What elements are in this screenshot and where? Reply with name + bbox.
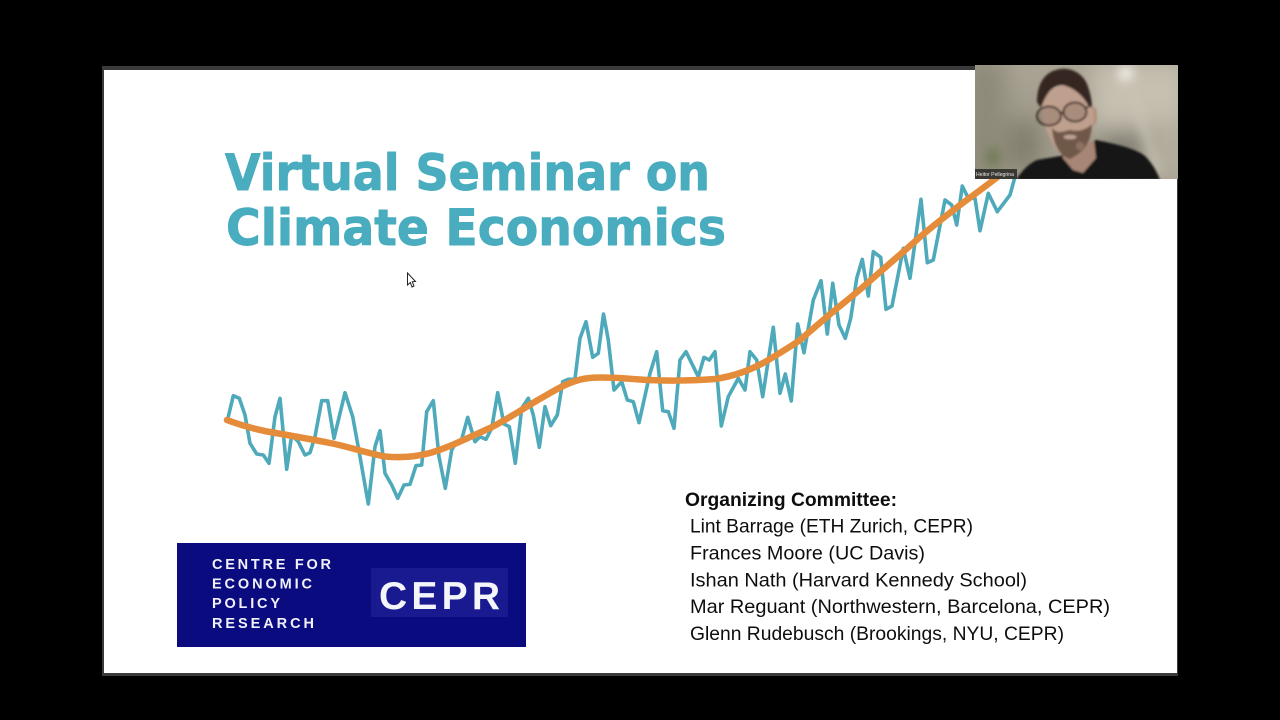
title: Virtual Seminar on: [225, 144, 710, 202]
webcam video of the speaker: [975, 65, 1178, 179]
organizing committee: Glenn Rudebusch (Brookings, NYU, CEPR): [690, 623, 1064, 645]
icon: mouse cursor: [408, 273, 416, 287]
teal annual series line: [228, 177, 1015, 504]
ear: [1091, 107, 1097, 125]
CEPR logo: ECONOMIC: [212, 576, 313, 592]
face: [1040, 85, 1094, 159]
organizing committee: Ishan Nath (Harvard Kennedy School): [690, 570, 1027, 592]
mouth: [1064, 135, 1076, 139]
organizing committee: Lint Barrage (ETH Zurich, CEPR): [690, 516, 973, 538]
neck: [1062, 140, 1096, 173]
speaker name tag: [975, 169, 1017, 179]
organizing committee: Organizing Committee:: [685, 489, 897, 511]
slide with seminar title, chart, logo and committee: [102, 65, 1178, 676]
glasses: [1037, 102, 1091, 126]
beard: [1052, 124, 1092, 159]
CEPR logo: POLICY: [212, 596, 280, 612]
shirt: [1016, 140, 1160, 180]
line chart: climate series and trend: [227, 175, 1015, 504]
title: [225, 144, 726, 257]
orange trend line: [227, 175, 1000, 457]
CEPR logo: CENTRE FOR: [212, 557, 332, 573]
title: Climate Economics: [226, 199, 726, 257]
organizing committee: [685, 489, 1110, 645]
organizing committee: Mar Reguant (Northwestern, Barcelona, CEPR): [690, 596, 1110, 618]
CEPR logo: CEPR: [379, 575, 500, 618]
CEPR logo: RESEARCH: [212, 616, 314, 632]
slide background: [102, 66, 1178, 676]
organizing committee: Frances Moore (UC Davis): [690, 542, 925, 564]
hair: [1037, 69, 1092, 108]
CEPR logo: [177, 543, 526, 647]
speaker name tag: Heitor Pellegrina: [976, 172, 1015, 178]
chin highlight: [1076, 142, 1084, 150]
